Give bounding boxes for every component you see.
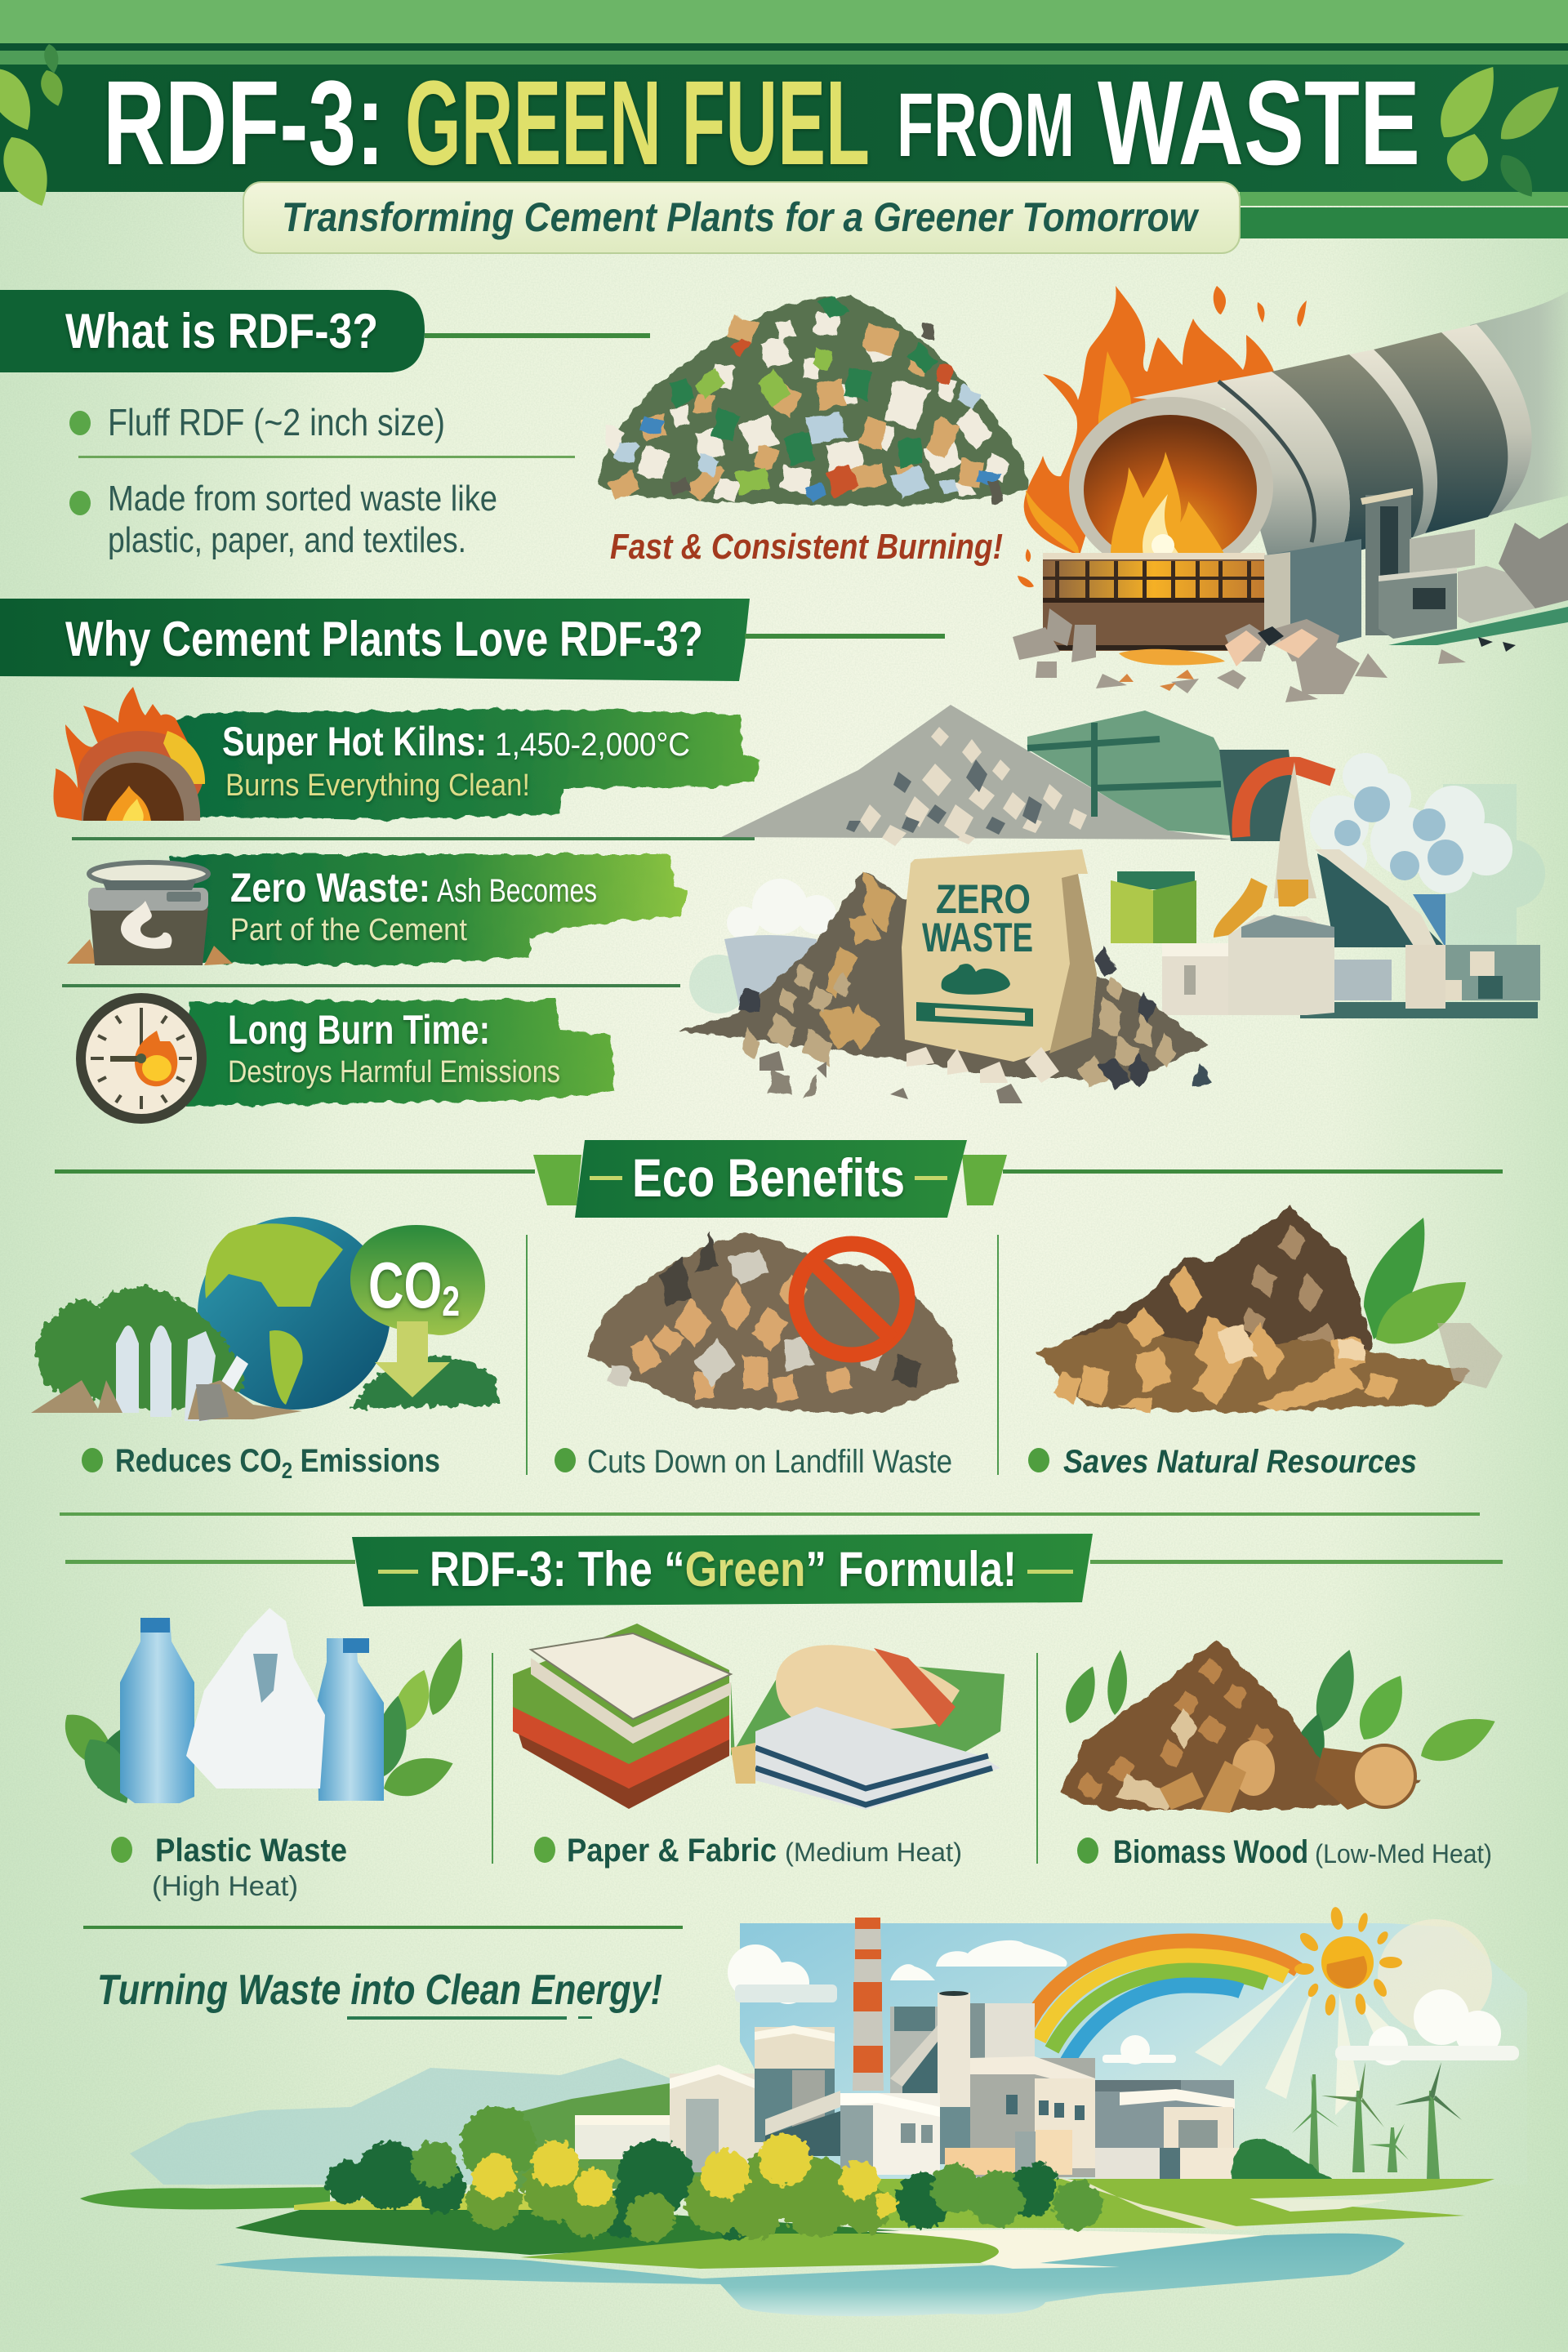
header leaves [0,43,1568,214]
card: reduces CO2 [31,1217,498,1483]
illustration: paper and fabric stacks [513,1624,1004,1810]
bullet: made from sorted waste: Made from sorted waste like [108,479,497,519]
item: zero waste: Part of the Cement [230,913,467,947]
title: FROM [897,75,1075,176]
kiln grate [1043,554,1265,651]
kiln far section [1470,292,1568,512]
plant buildings [1300,1002,1538,1018]
ground lawns [80,2176,1494,2316]
sky [740,1923,1527,2185]
title [103,56,1420,190]
flames [1024,286,1274,555]
illustration: clean energy landscape [80,1906,1527,2316]
illustration: earth and CO2: 2 [442,1278,460,1325]
plant clouds backdrop [689,784,1545,1013]
ribbon: RDF-3 green formula [352,1534,1093,1606]
illustration: biomass wood pile [1058,1639,1503,1813]
icon: kiln with flames [53,687,205,821]
water [215,2234,1405,2316]
item: super hot kilns [53,687,761,821]
rock pile [678,871,1212,1098]
heading: what is RDF-3: What is RDF-3? [65,304,378,359]
item: zero waste: Zero Waste: [230,865,430,911]
label: biomass wood: Biomass Wood [1113,1834,1308,1870]
clouds [728,1940,1519,2065]
card: cuts down on landfill waste [555,1233,960,1480]
rainbow [1026,1941,1298,2065]
panel: why cement plants love RDF-3 [0,599,945,1124]
callout: fast and consistent burning: Fast & Consistent Burning! [610,527,1003,567]
green stack [1117,871,1195,889]
item: long burn time: Destroys Harmful Emissions [228,1055,560,1089]
illustration: zero waste plant scene: WASTE [922,915,1033,960]
trees [326,2106,1102,2243]
item: super hot kilns: Super Hot Kilns: [222,719,487,764]
card: paper and fabric [513,1624,1004,1869]
subtitle pill: Transforming Cement Plants for a Greener Tomorrow [282,194,1200,240]
label: reduces CO2: Reduces CO [115,1443,310,1479]
sun [1294,1906,1402,2016]
wind turbines [1292,2062,1462,2180]
closing tagline [83,1926,683,2020]
hills [130,2058,700,2185]
item: zero waste: Ash Becomes [437,873,597,909]
label: paper and fabric: (Medium Heat) [785,1838,962,1867]
label: cuts down on landfill: Cuts Down on Landfill Waste [587,1444,952,1480]
header band [0,0,1568,238]
illustration: bottles and bag [54,1608,473,1813]
kiln rubble [1388,607,1568,645]
kiln mouth [1069,397,1273,577]
illustration: earth and CO2: CO [368,1249,466,1321]
label: plastic waste [111,1833,347,1902]
label: biomass wood [1077,1834,1492,1870]
card: biomass wood [1058,1639,1503,1870]
card: plastic waste [54,1608,473,1902]
chimney [853,1918,884,2091]
zero waste sack [902,849,1097,1062]
illustration: earth and CO2 [31,1217,498,1421]
subtitle pill [243,182,1240,253]
illustration: zero waste plant scene [678,705,1545,1103]
label: reduces CO2: Emissions [292,1443,440,1479]
bullet: made from sorted waste [69,479,497,560]
label: paper and fabric [534,1833,962,1869]
ribbon: RDF-3 green formula: RDF-3: The “Green” Formula! [430,1542,1017,1597]
label: paper and fabric: Paper & Fabric [567,1833,777,1869]
label: biomass wood: (Low-Med Heat) [1315,1839,1492,1869]
bullet: made from sorted waste: plastic, paper, and textiles. [108,520,466,560]
title: RDF-3: [103,56,385,190]
illustration: landfill with no sign [588,1233,960,1413]
item: super hot kilns: 1,450-2,000°C [495,727,690,763]
illustration: RDF fluff pile [598,296,1027,506]
section: eco benefits [31,1140,1503,1483]
kiln hood and red arch [1219,750,1298,841]
item: long burn time [76,993,615,1124]
section: green formula [54,1534,1503,1902]
illustration: wood pile with leaves [1037,1206,1503,1413]
kiln side structures [1264,539,1361,653]
item: super hot kilns: Burns Everything Clean! [225,768,530,803]
crane arm [1214,878,1267,938]
closing tagline: Turning Waste into Clean Energy! [97,1967,662,2014]
item: long burn time: Long Burn Time: [228,1007,490,1053]
panel: what is RDF-3 [0,290,650,560]
factory [575,1918,1260,2180]
title: GREEN FUEL [405,56,870,190]
left cloud [727,879,836,939]
illustration: zero waste plant scene: ZERO [936,876,1031,922]
heading: why cement plants [0,599,945,681]
right bush [1233,2139,1339,2182]
item: zero waste [67,854,688,965]
label: plastic waste: Plastic Waste [155,1833,347,1869]
label: plastic waste: (High Heat) [152,1871,298,1902]
card: saves natural resources [1028,1206,1503,1480]
heading: why cement plants: Why Cement Plants Love RDF-3? [65,612,703,666]
mountain pile [721,705,1231,840]
bullet: fluff RDF: Fluff RDF (~2 inch size) [108,401,445,443]
label: saves natural resources: Saves Natural Resources [1063,1444,1417,1480]
label: reduces CO2 [82,1443,440,1483]
sun beams [1195,1974,1405,2115]
heading: what is RDF-3 [0,290,650,372]
icon: clock with flame [76,993,207,1124]
label: reduces CO2: 2 [282,1458,292,1483]
ribbon: eco benefits [533,1140,1007,1218]
steam clouds [1310,753,1512,893]
ribbon: eco benefits: Eco Benefits [632,1147,905,1208]
illustration: cement kiln [1013,286,1568,702]
title: WASTE [1098,56,1420,190]
icon: ash bucket [67,862,233,965]
